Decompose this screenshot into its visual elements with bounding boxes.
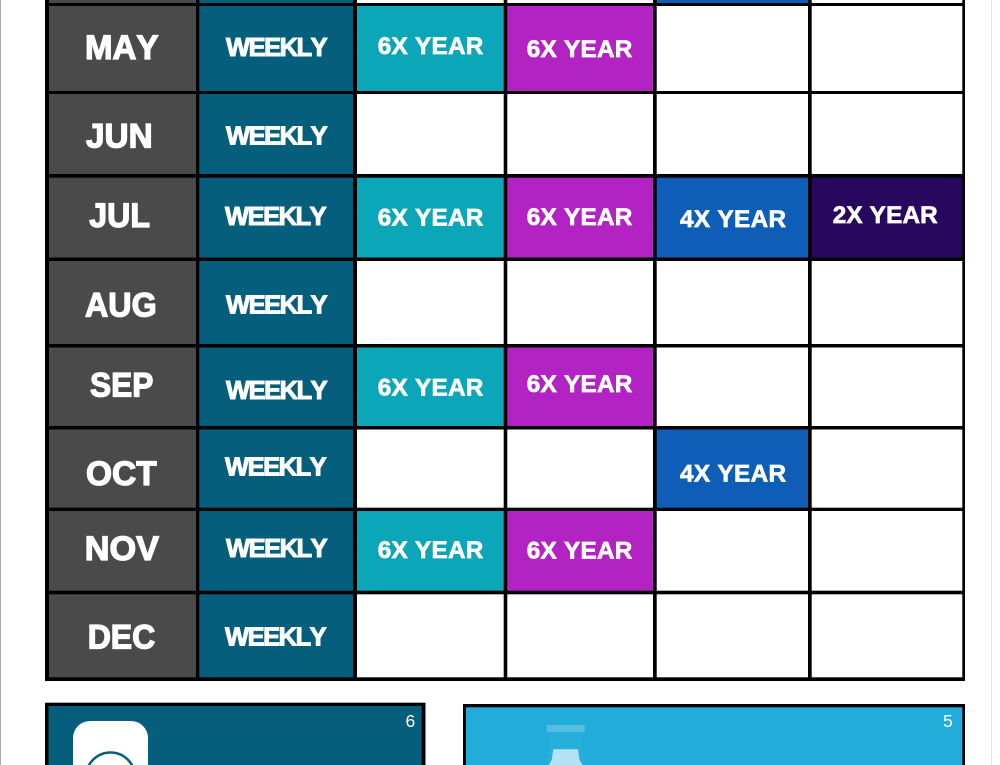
row: May [49,6,962,91]
cell: weekly: WEEKLY [226,34,328,62]
page number 6: 6 [406,711,415,731]
cell: 6x year teal [357,6,504,91]
cell: 2x year: 2X YEAR [833,202,938,229]
row: Jul [49,178,962,258]
cell: weekly [199,511,353,591]
cell: 6x year magenta: 6X YEAR [527,204,633,231]
cell: weekly: WEEKLY [225,203,327,231]
row: Jun [49,94,962,174]
cell: weekly: WEEKLY [226,377,328,405]
month: Dec [49,594,196,677]
month: Aug [49,261,196,344]
cell: weekly [199,594,353,677]
cell: 6x year teal [357,178,504,258]
month: May [49,6,196,91]
row: Nov [49,511,962,591]
month: Nov [49,511,196,591]
month: Oct [49,430,196,508]
month: Oct: OCT [86,455,157,493]
page number 5: 5 [943,711,953,731]
icon: bottle [545,725,586,765]
cell: weekly: WEEKLY [225,454,327,482]
cell: weekly [199,261,353,344]
cell: 6x year teal [357,511,504,591]
cell: 6x year magenta: 6X YEAR [527,538,633,565]
month: Sep [49,348,196,426]
month: May: MAY [85,29,158,67]
cell: weekly: WEEKLY [226,122,328,150]
cell: 6x year teal: 6X YEAR [378,205,484,232]
cell: 6x year teal: 6X YEAR [378,375,484,402]
cell: weekly: WEEKLY [226,291,328,319]
icon: rounded white tile with circle [73,721,148,765]
cell: 6x year magenta: 6X YEAR [527,36,633,63]
row: Sep [49,348,962,426]
month: Nov: NOV [85,530,159,568]
cell: 4x year: 4X YEAR [680,460,786,488]
cell: 2x year [812,178,962,258]
panel: right blue card [463,704,965,765]
row: Oct [49,430,962,508]
cell: 4x year [657,430,808,508]
cell: 4x year: 4X YEAR [680,206,786,233]
panel: left teal card [45,703,426,765]
cell: 6x year teal: 6X YEAR [378,33,484,60]
cell: weekly [199,178,353,258]
month: Dec: DEC [88,618,155,656]
cell: weekly [199,94,353,174]
cell: 6x year magenta: 6X YEAR [527,371,633,398]
cell: weekly [199,430,353,508]
cell: 6x year teal [357,348,504,426]
month: Jul [49,178,196,258]
row: Dec [49,594,962,677]
month: Jun [49,94,196,174]
month: Jul: JUL [89,197,150,235]
month: Aug: AUG [85,286,157,324]
cell: 6x year magenta [507,511,653,591]
month: Sep: SEP [90,366,153,404]
cell: weekly [199,348,353,426]
row: Aug [49,261,962,344]
cell: 4x year [657,178,808,258]
cell: 6x year teal: 6X YEAR [378,537,484,564]
month: Jun: JUN [86,118,153,156]
cell: 6x year magenta [507,348,653,426]
cell: weekly: WEEKLY [225,623,327,651]
cell: weekly [199,6,353,91]
cell: 6x year magenta [507,6,653,91]
cell: weekly: WEEKLY [226,535,328,563]
cell: 6x year magenta [507,178,653,258]
